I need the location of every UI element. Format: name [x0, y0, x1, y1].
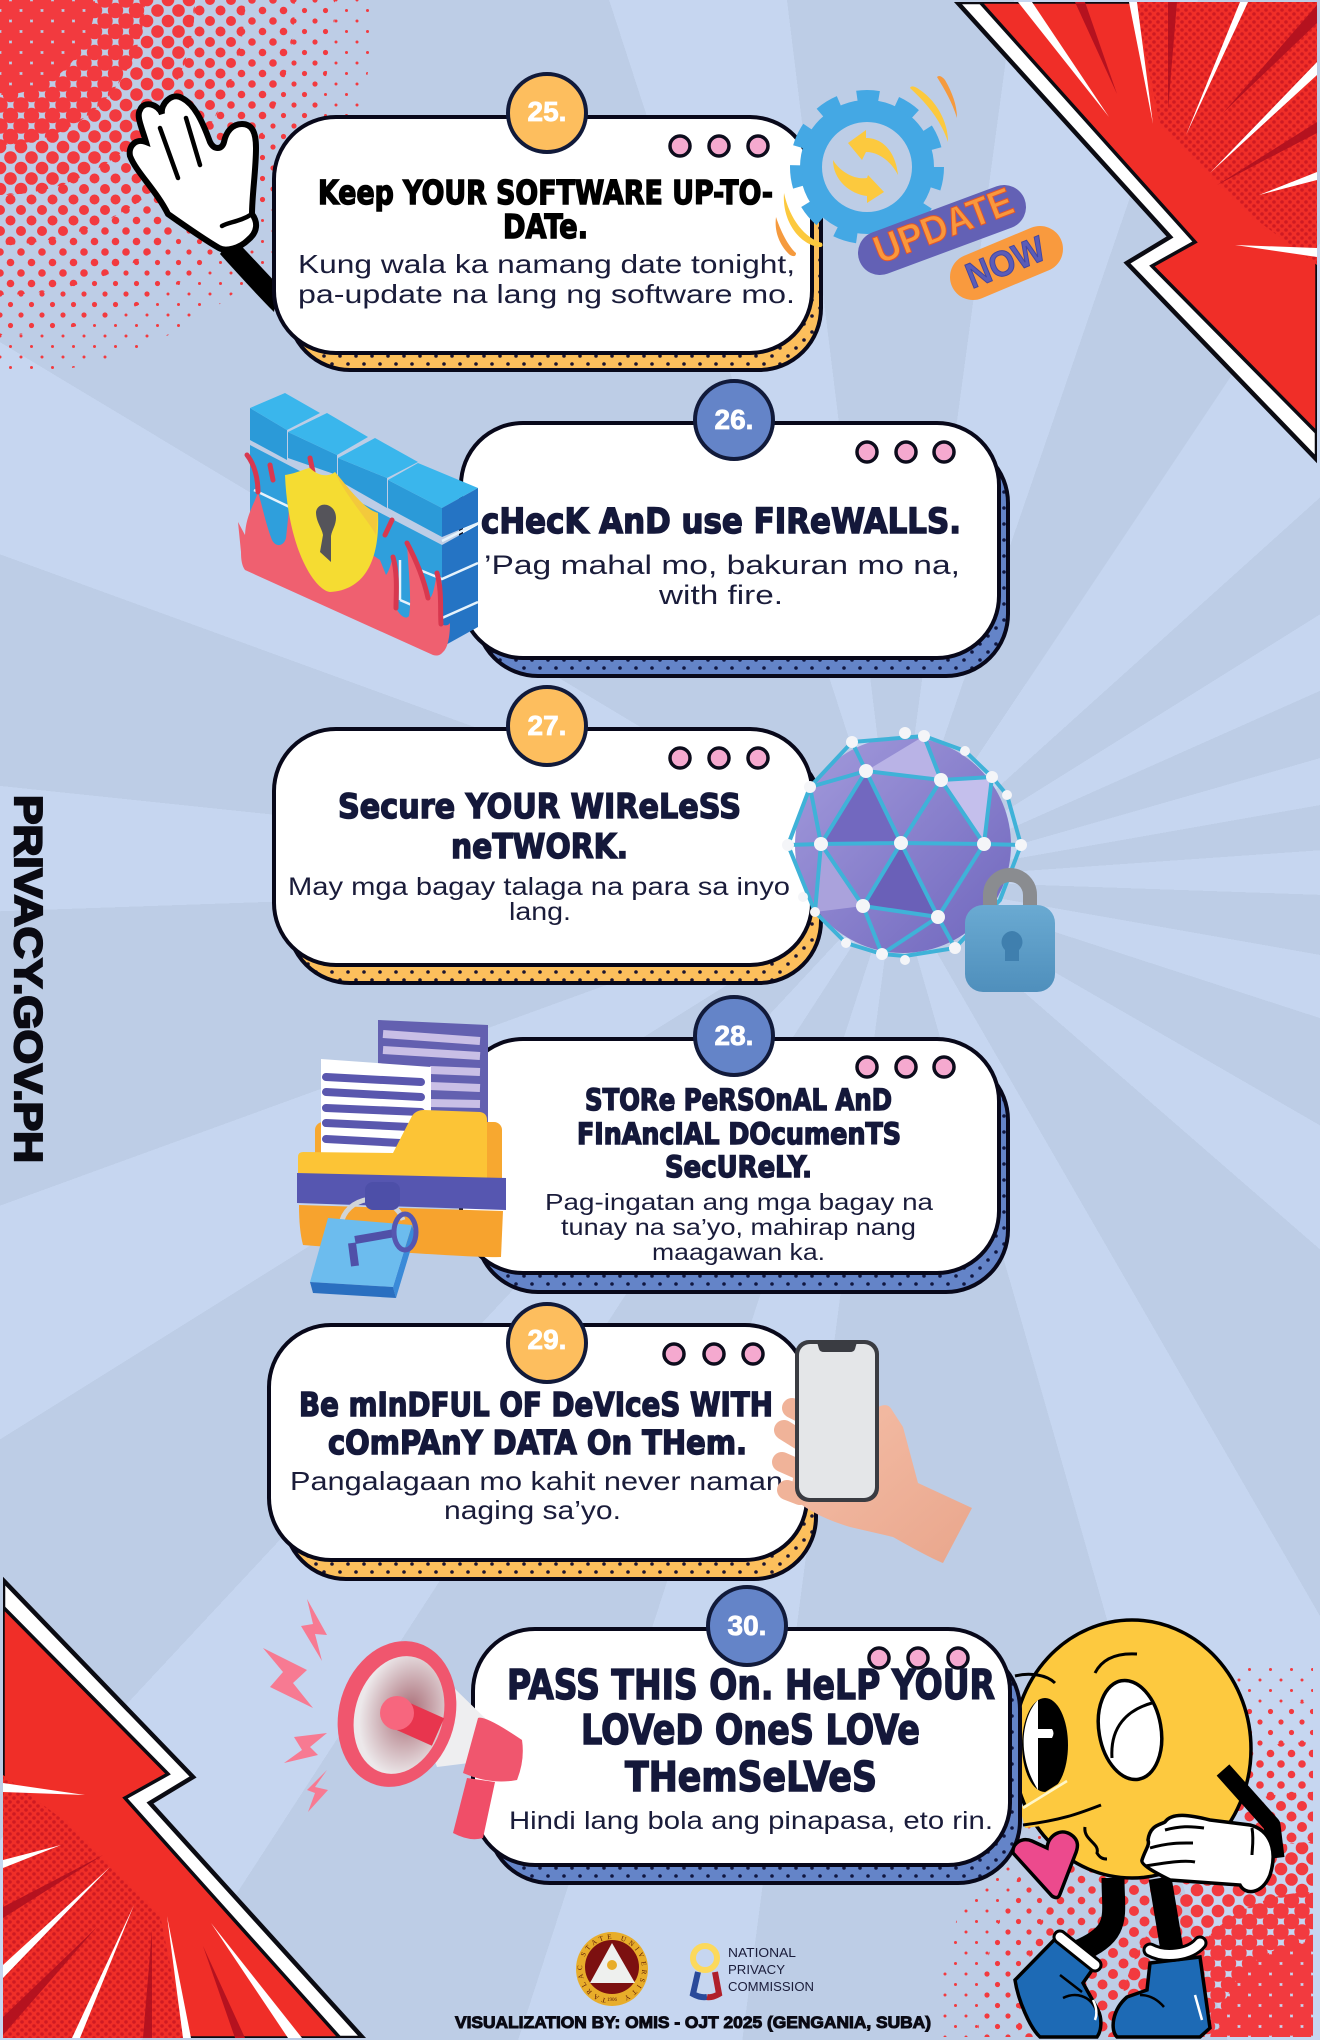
logo: National Privacy Commission: COMMISSION [728, 1979, 814, 1994]
heading [507, 1661, 995, 1801]
badge 27: 27. [528, 710, 566, 741]
body text: lang. [509, 898, 571, 926]
body text [545, 1189, 933, 1265]
body text [290, 1466, 783, 1525]
body text: Hindi lang bola ang pinapasa, eto rin. [509, 1807, 993, 1835]
window dots [857, 442, 954, 462]
badge 25: 25. [528, 96, 566, 127]
badge 29: 29. [528, 1324, 566, 1355]
heading: Secure YOUR WIReLeSS [338, 787, 741, 827]
panel: tip 29 card [269, 1304, 816, 1579]
heading: Keep YOUR SOFTWARE UP-TO- [318, 173, 773, 212]
window dots [869, 1648, 968, 1668]
icon: update gear with badges: UPDATE [868, 180, 1020, 272]
logo: Tarlac State University seal: 1906 [607, 1998, 618, 2003]
icon: waving glove [130, 96, 278, 312]
heading [318, 173, 773, 246]
heading: SecUReLY. [665, 1150, 812, 1184]
window dots [670, 136, 768, 156]
vertical site url: PRIVACY.GOV.PH [6, 795, 49, 1163]
icon: locked folder [297, 1020, 506, 1298]
window dots [670, 748, 768, 768]
comic burst: top right [957, 2, 1317, 460]
panel: tip 25 card [274, 74, 821, 370]
logo: Tarlac State University seal: TARLAC STATE UNIVERSITY [578, 1934, 647, 2003]
heading: DATe. [503, 207, 588, 246]
badge 29 [508, 1304, 586, 1382]
icon: megaphone with sparks [263, 1599, 523, 1839]
heading: neTWORK. [451, 827, 628, 867]
body text: with fire. [658, 580, 783, 610]
halftone: bottom right corner [938, 1662, 1313, 2037]
badge 28 [695, 997, 773, 1075]
body text: Kung wala ka namang date tonight, [298, 249, 795, 279]
badge 26: 26. [715, 404, 753, 435]
body text: tunay na sa’yo, mahirap nang [561, 1214, 916, 1240]
footer credit: VISUALIZATION BY: OMIS - OJT 2025 (GENGANIA, SUBA) [455, 2013, 931, 2032]
badge 25 [508, 74, 586, 152]
body text: naging sa’yo. [444, 1495, 621, 1525]
icon: update gear with badges [776, 76, 1051, 296]
badge 30 [708, 1587, 786, 1665]
character: yellow emoji mascot [1013, 1620, 1276, 2037]
panel: tip 27 card [274, 687, 821, 983]
icon: update gear with badges: NOW [960, 228, 1051, 296]
window dots [857, 1057, 954, 1077]
body text: ’Pag mahal mo, bakuran mo na, [484, 550, 960, 580]
badge 26 [695, 381, 773, 459]
window dots [664, 1344, 763, 1364]
badge 30: 30. [728, 1610, 766, 1641]
comic burst: bottom left [3, 1580, 363, 2038]
body text [484, 550, 960, 610]
panel: tip 28 card [461, 997, 1008, 1292]
badge 28: 28. [715, 1020, 753, 1051]
icon: network globe with padlock [782, 727, 1055, 992]
heading [299, 1385, 773, 1462]
heading: LOVeD OneS LOVe [581, 1706, 920, 1754]
badge 27 [508, 687, 586, 765]
body text: maagawan ka. [652, 1239, 825, 1265]
panel: tip 26 card [461, 381, 1008, 676]
icon: firewall with shield [238, 393, 478, 656]
heading: cHecK AnD use FIReWALLS. [481, 502, 961, 542]
heading: PASS THIS On. HeLP YOUR [507, 1661, 995, 1709]
heading [577, 1083, 901, 1184]
body text: Pag-ingatan ang mga bagay na [545, 1189, 933, 1215]
heading: cOmPAnY DATA On THem. [328, 1423, 747, 1462]
heading: THemSeLVeS [625, 1753, 877, 1801]
logo: National Privacy Commission [693, 1945, 814, 1997]
body text [288, 873, 790, 926]
icon: pink heart [1013, 1832, 1077, 1898]
body text: May mga bagay talaga na para sa inyo [288, 873, 790, 901]
heading [338, 787, 741, 867]
heading: Be mInDFUL OF DeVIceS WITH [299, 1385, 773, 1424]
body text [298, 249, 795, 309]
heading: FInAncIAL DOcumenTS [577, 1117, 901, 1151]
body text: Pangalagaan mo kahit never naman [290, 1466, 783, 1496]
icon: hand holding phone [782, 1340, 972, 1563]
logo: National Privacy Commission: PRIVACY [728, 1962, 785, 1977]
panel: tip 30 card [473, 1587, 1020, 1883]
heading: STORe PeRSOnAL AnD [585, 1083, 892, 1117]
halftone: top left corner [0, 0, 375, 375]
logo: National Privacy Commission: NATIONAL [728, 1945, 796, 1960]
body text: pa-update na lang ng software mo. [298, 279, 795, 309]
